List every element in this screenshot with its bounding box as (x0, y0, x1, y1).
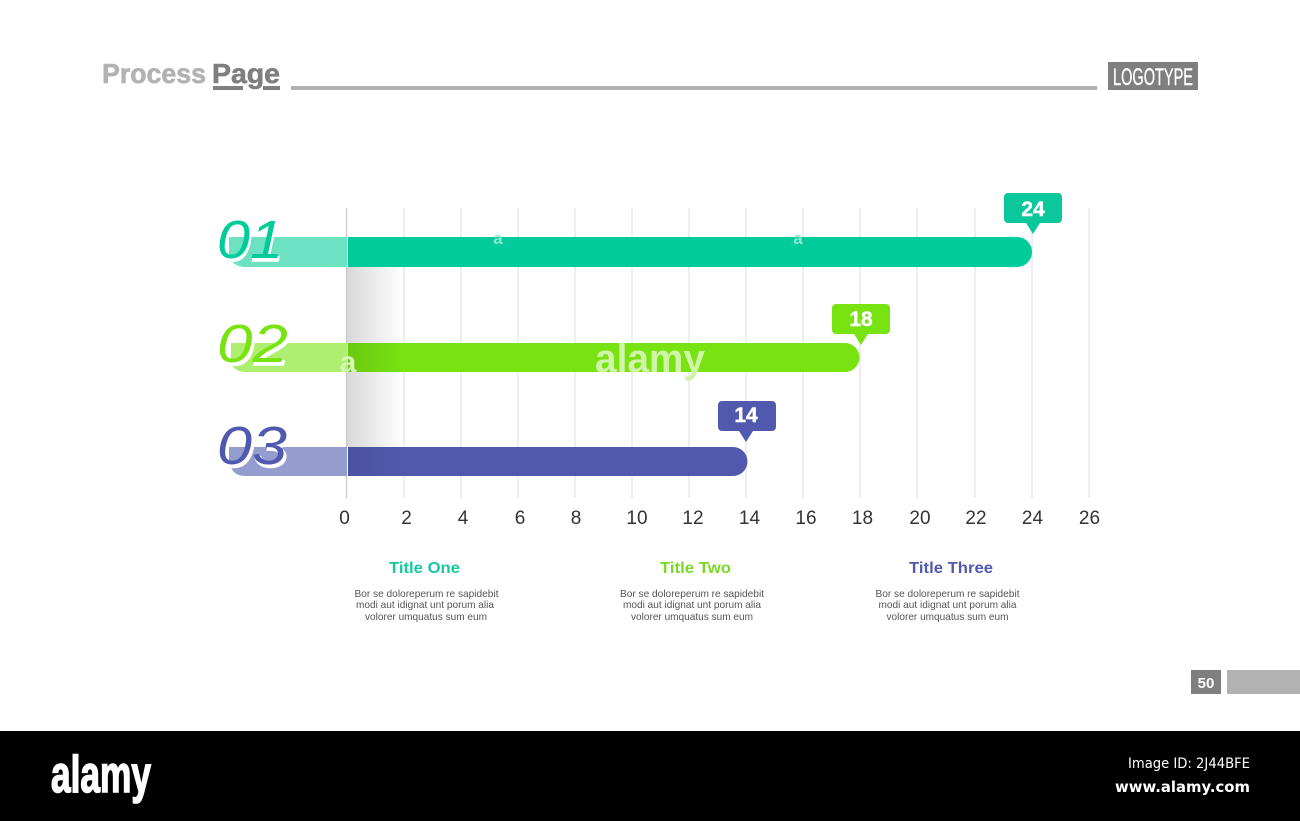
x axis labels: 12 (682, 508, 704, 529)
title: Process Page: Page (212, 58, 280, 89)
x axis labels: 4 (458, 508, 469, 529)
image id: Image ID: 2J44BFE (1128, 756, 1250, 772)
bar 01: a (493, 229, 503, 248)
text block: Title Three: Bor se doloreperum re sapidebit (876, 589, 1020, 600)
text block: Title Two: Title Two (660, 560, 731, 577)
x axis labels: 10 (626, 508, 648, 529)
row number 02: 02 (219, 317, 290, 377)
page number (1191, 670, 1221, 694)
callout: 18 (832, 304, 890, 345)
text block: Title One: Bor se doloreperum re sapidebit (354, 589, 499, 600)
row number 01: 01 (217, 210, 283, 270)
page number: 50 (1198, 675, 1214, 692)
x axis labels: 18 (852, 508, 873, 529)
page header (102, 58, 1198, 91)
text block: Title One: volorer umquatus sum eum (365, 612, 487, 623)
x axis labels: 2 (401, 508, 412, 529)
text block: Title Two: Bor se doloreperum re sapidebit (620, 589, 764, 600)
logotype badge (1108, 62, 1198, 91)
callout: 24 (1004, 193, 1062, 234)
footer band (0, 731, 1300, 821)
text block: Title One (354, 560, 499, 623)
x axis labels (339, 508, 1100, 529)
x axis labels: 24 (1022, 508, 1043, 529)
shadow below first bars (347, 267, 404, 447)
text block: Title Three: Title Three (909, 560, 993, 577)
row number 02: 02 (217, 314, 288, 374)
text block: Title One: Title One (389, 560, 460, 577)
x axis labels: 26 (1079, 508, 1100, 529)
text block: Title Three: volorer umquatus sum eum (886, 612, 1008, 623)
callout: 14 (718, 401, 776, 442)
x axis labels: 14 (739, 508, 760, 529)
alamy logo: alamy (51, 746, 151, 804)
bar 02: a (340, 346, 357, 379)
x axis labels: 0 (339, 508, 350, 529)
bar 02 (231, 337, 860, 381)
row number 03: 03 (217, 416, 287, 476)
callout: 24: 24 (1021, 198, 1045, 221)
callout: 14: 14 (734, 404, 758, 427)
callout: 18: 18 (849, 308, 873, 331)
website: www.alamy.com (1115, 778, 1250, 796)
bar 03 (229, 447, 748, 476)
x axis labels: 6 (515, 508, 525, 529)
bar 01: a (793, 229, 803, 248)
bar 01 (229, 229, 1032, 267)
x axis labels: 8 (571, 508, 581, 529)
text block: Title One: modi aut idignat unt porum alia (356, 600, 494, 611)
text block: Title Three (876, 560, 1020, 623)
bar 02: alamy (595, 337, 706, 381)
text block: Title Two: modi aut idignat unt porum alia (623, 600, 761, 611)
bar chart (217, 193, 1100, 529)
x axis labels: 16 (795, 508, 817, 529)
x axis labels: 22 (965, 508, 987, 529)
x axis labels: 20 (909, 508, 931, 529)
title: Process Page: Process (102, 58, 206, 89)
text block: Title Two: volorer umquatus sum eum (631, 612, 753, 623)
row number 01: 01 (218, 213, 284, 273)
logotype badge: LOGOTYPE (1113, 64, 1193, 91)
row number 03: 03 (219, 419, 289, 479)
page number bar (1227, 670, 1300, 694)
header rule (291, 86, 1097, 90)
text block: Title Two (620, 560, 764, 623)
title: Process Page (102, 58, 280, 90)
text block: Title Three: modi aut idignat unt porum alia (878, 600, 1017, 611)
